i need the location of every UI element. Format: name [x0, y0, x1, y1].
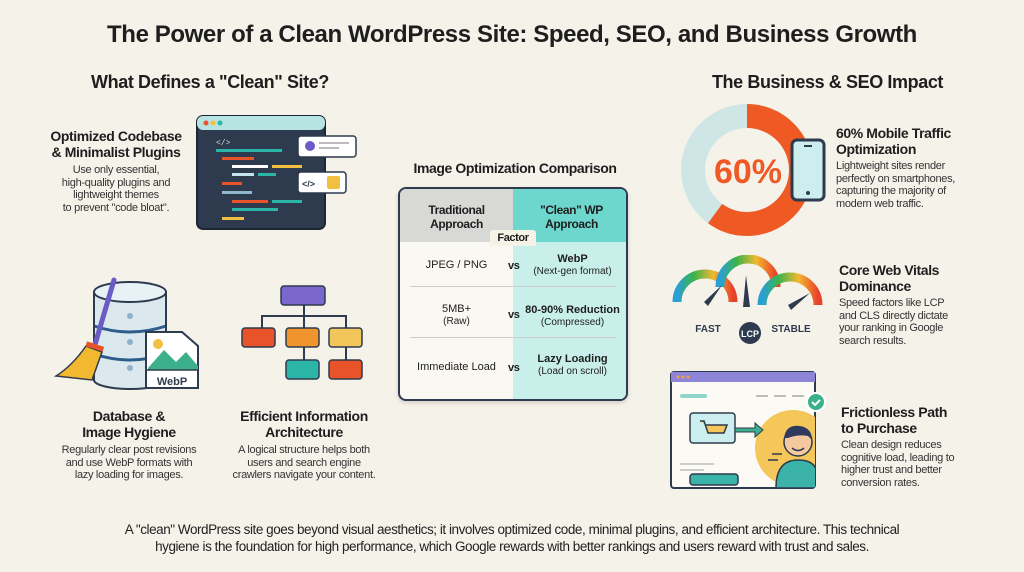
text: database hygiene: and use WebP formats with — [66, 456, 192, 468]
text: frictionless path: higher trust and better — [841, 464, 942, 476]
table: comparison: WebP — [557, 253, 588, 265]
text: mobile traffic: Lightweight sites render — [836, 160, 945, 172]
text: optimized codebase: & Minimalist Plugins — [52, 144, 180, 160]
footer summary — [124, 522, 899, 554]
chart: 60% donut with phone: 60% — [714, 153, 782, 191]
text: frictionless path: Clean design reduces — [841, 439, 941, 451]
text: database hygiene: Image Hygiene — [82, 424, 176, 440]
text: core web vitals: Speed factors like LCP — [839, 297, 944, 309]
text: core web vitals: Dominance — [839, 278, 911, 294]
text: frictionless path: conversion rates. — [841, 476, 920, 488]
text: information architecture: A logical structure helps both — [238, 444, 370, 456]
table: comparison: (Next-gen format) — [533, 266, 612, 277]
text: mobile traffic: modern web traffic. — [836, 198, 924, 210]
text: optimized codebase: lightweight themes — [73, 189, 159, 201]
icon: browser with cart and user — [670, 371, 826, 489]
text: frictionless path: cognitive load, leading to — [841, 452, 954, 464]
text: core web vitals: and CLS directly dictate — [839, 310, 948, 322]
table: comparison: Approach — [430, 217, 483, 231]
text: core web vitals — [839, 262, 948, 346]
footer summary: hygiene is the foundation for high performance, which Google rewards with better rankings and users reward with trust and sales. — [155, 539, 869, 554]
text: mobile traffic: perfectly on smartphones, — [836, 172, 955, 184]
text: core web vitals: your ranking in Google — [839, 322, 943, 334]
icon: database with broom and webp: WebP — [157, 376, 187, 388]
text: core web vitals: search results. — [839, 334, 906, 346]
text: information architecture: users and search engine — [247, 456, 361, 468]
text: database hygiene: lazy loading for images. — [75, 469, 183, 481]
text: database hygiene: Database & — [93, 408, 165, 424]
chart: 60% donut with phone — [681, 104, 826, 236]
text: mobile traffic: Optimization — [836, 141, 916, 157]
text: frictionless path: Frictionless Path — [841, 404, 947, 420]
text: core web vitals: Core Web Vitals — [839, 262, 939, 278]
text: mobile traffic: 60% Mobile Traffic — [836, 125, 951, 141]
icon: tree architecture — [241, 285, 363, 380]
icon: speed gauges: FAST — [695, 324, 721, 335]
table: comparison: Traditional — [428, 203, 485, 217]
heading: what defines clean: What Defines a "Clean" Site? — [91, 72, 329, 92]
table: comparison: (Compressed) — [541, 317, 604, 328]
table: comparison: (Raw) — [443, 316, 470, 327]
table: comparison: 5MB+ — [442, 303, 471, 315]
text: database hygiene: Regularly clear post revisions — [62, 444, 196, 456]
text: optimized codebase: high-quality plugins and — [62, 176, 170, 188]
table: comparison: "Clean" WP — [540, 203, 603, 217]
table: comparison: Factor — [497, 232, 529, 244]
heading: image optimization comparison: Image Optimization Comparison — [413, 160, 617, 176]
icon: code editor — [196, 115, 357, 230]
icon: speed gauges: STABLE — [771, 324, 811, 335]
table: comparison: 80-90% Reduction — [525, 304, 620, 316]
table: comparison: vs — [508, 362, 519, 374]
text: mobile traffic: capturing the majority of — [836, 185, 946, 197]
text: frictionless path: to Purchase — [841, 420, 917, 436]
heading: business & seo impact: The Business & SEO Impact — [712, 72, 943, 92]
footer summary: A "clean" WordPress site goes beyond visual aesthetics; it involves optimized code, minimal plugins, and efficient architecture. This technical — [125, 522, 899, 537]
text: optimized codebase — [50, 128, 182, 214]
text: optimized codebase: Use only essential, — [73, 164, 159, 176]
text: frictionless path — [841, 404, 954, 488]
title: The Power of a Clean WordPress Site: Speed, SEO, and Business Growth — [107, 21, 917, 48]
text: optimized codebase: Optimized Codebase — [50, 128, 182, 144]
table: comparison: Immediate Load — [417, 361, 496, 373]
icon: database with broom and webp — [54, 278, 199, 390]
icon: code editor: </> — [302, 179, 315, 189]
text: information architecture: Architecture — [265, 424, 343, 440]
table: comparison: (Load on scroll) — [538, 366, 607, 377]
text: optimized codebase: to prevent "code bloat". — [63, 202, 169, 214]
table: comparison: vs — [508, 309, 519, 321]
table: comparison: JPEG / PNG — [426, 259, 487, 271]
icon: code editor: </> — [216, 139, 231, 148]
table: comparison: vs — [508, 260, 519, 272]
icon: speed gauges: LCP — [741, 329, 759, 339]
text: information architecture: Efficient Information — [240, 408, 368, 424]
table: comparison: Lazy Loading — [537, 353, 608, 365]
table: comparison — [398, 187, 628, 401]
text: information architecture: crawlers navigate your content. — [233, 469, 375, 481]
icon: speed gauges — [672, 255, 822, 344]
text: database hygiene — [62, 408, 196, 481]
text: information architecture — [233, 408, 375, 481]
text: mobile traffic — [836, 125, 955, 210]
table: comparison: Approach — [545, 217, 598, 231]
